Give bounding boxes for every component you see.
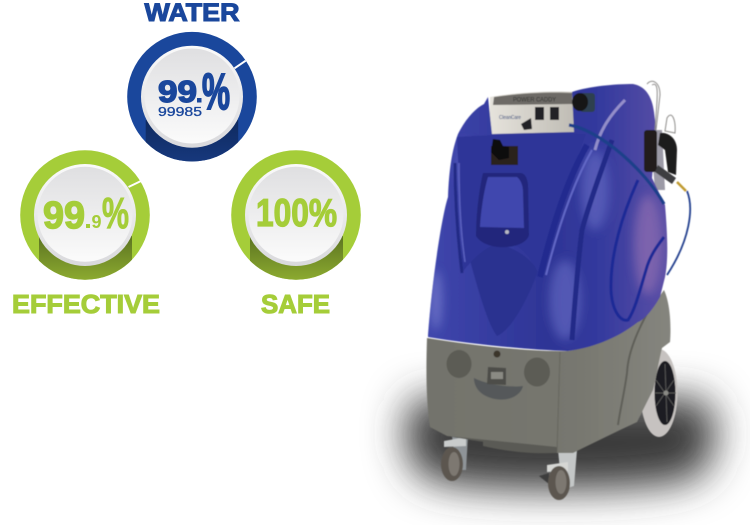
value: 100%: 100% [256,192,337,235]
panel logo: CleanCare: CleanCare [499,115,521,121]
base handle [474,378,523,400]
floor shadow [405,398,716,490]
control panel [489,92,588,134]
value: 99.9%: 99 [43,195,85,237]
large rear wheel [640,349,678,437]
right caster [539,462,570,500]
spray wand [644,81,690,275]
gauge: safe 100% [231,150,361,281]
panel switches [521,107,559,130]
value: 99.99985%: 99 [158,74,197,109]
black selector knob [491,139,518,165]
base indicator [494,350,500,358]
value: 99.9%: % [102,189,129,238]
body shading [430,100,664,340]
wand backing [650,130,665,190]
blue tank body [428,84,667,351]
base cup holes [446,350,472,378]
machine: carpet extractor [426,81,690,500]
gray base [426,290,670,453]
base latch [487,367,506,385]
left caster [441,437,466,481]
solution hose [569,125,664,204]
value: 99.99985%: % [202,63,230,121]
gauge: water 99.99985% [127,32,257,165]
value: 99.99985% [158,63,230,121]
panel label: POWER CADDY: POWER CADDY [513,96,557,104]
wand supply hose [667,191,690,275]
vacuum port [572,93,595,112]
tank handle recess [476,173,529,247]
value: 99.9%: 9 [92,212,102,232]
value: 99.99985%: 99985 [158,105,202,119]
rear casters [452,436,577,490]
value: 99.9% [43,189,129,238]
tank handle bolt [505,230,509,234]
label: EFFECTIVE: EFFECTIVE [12,289,160,319]
gauge: effective 99.9% [20,150,150,281]
label: SAFE: SAFE [261,289,330,319]
